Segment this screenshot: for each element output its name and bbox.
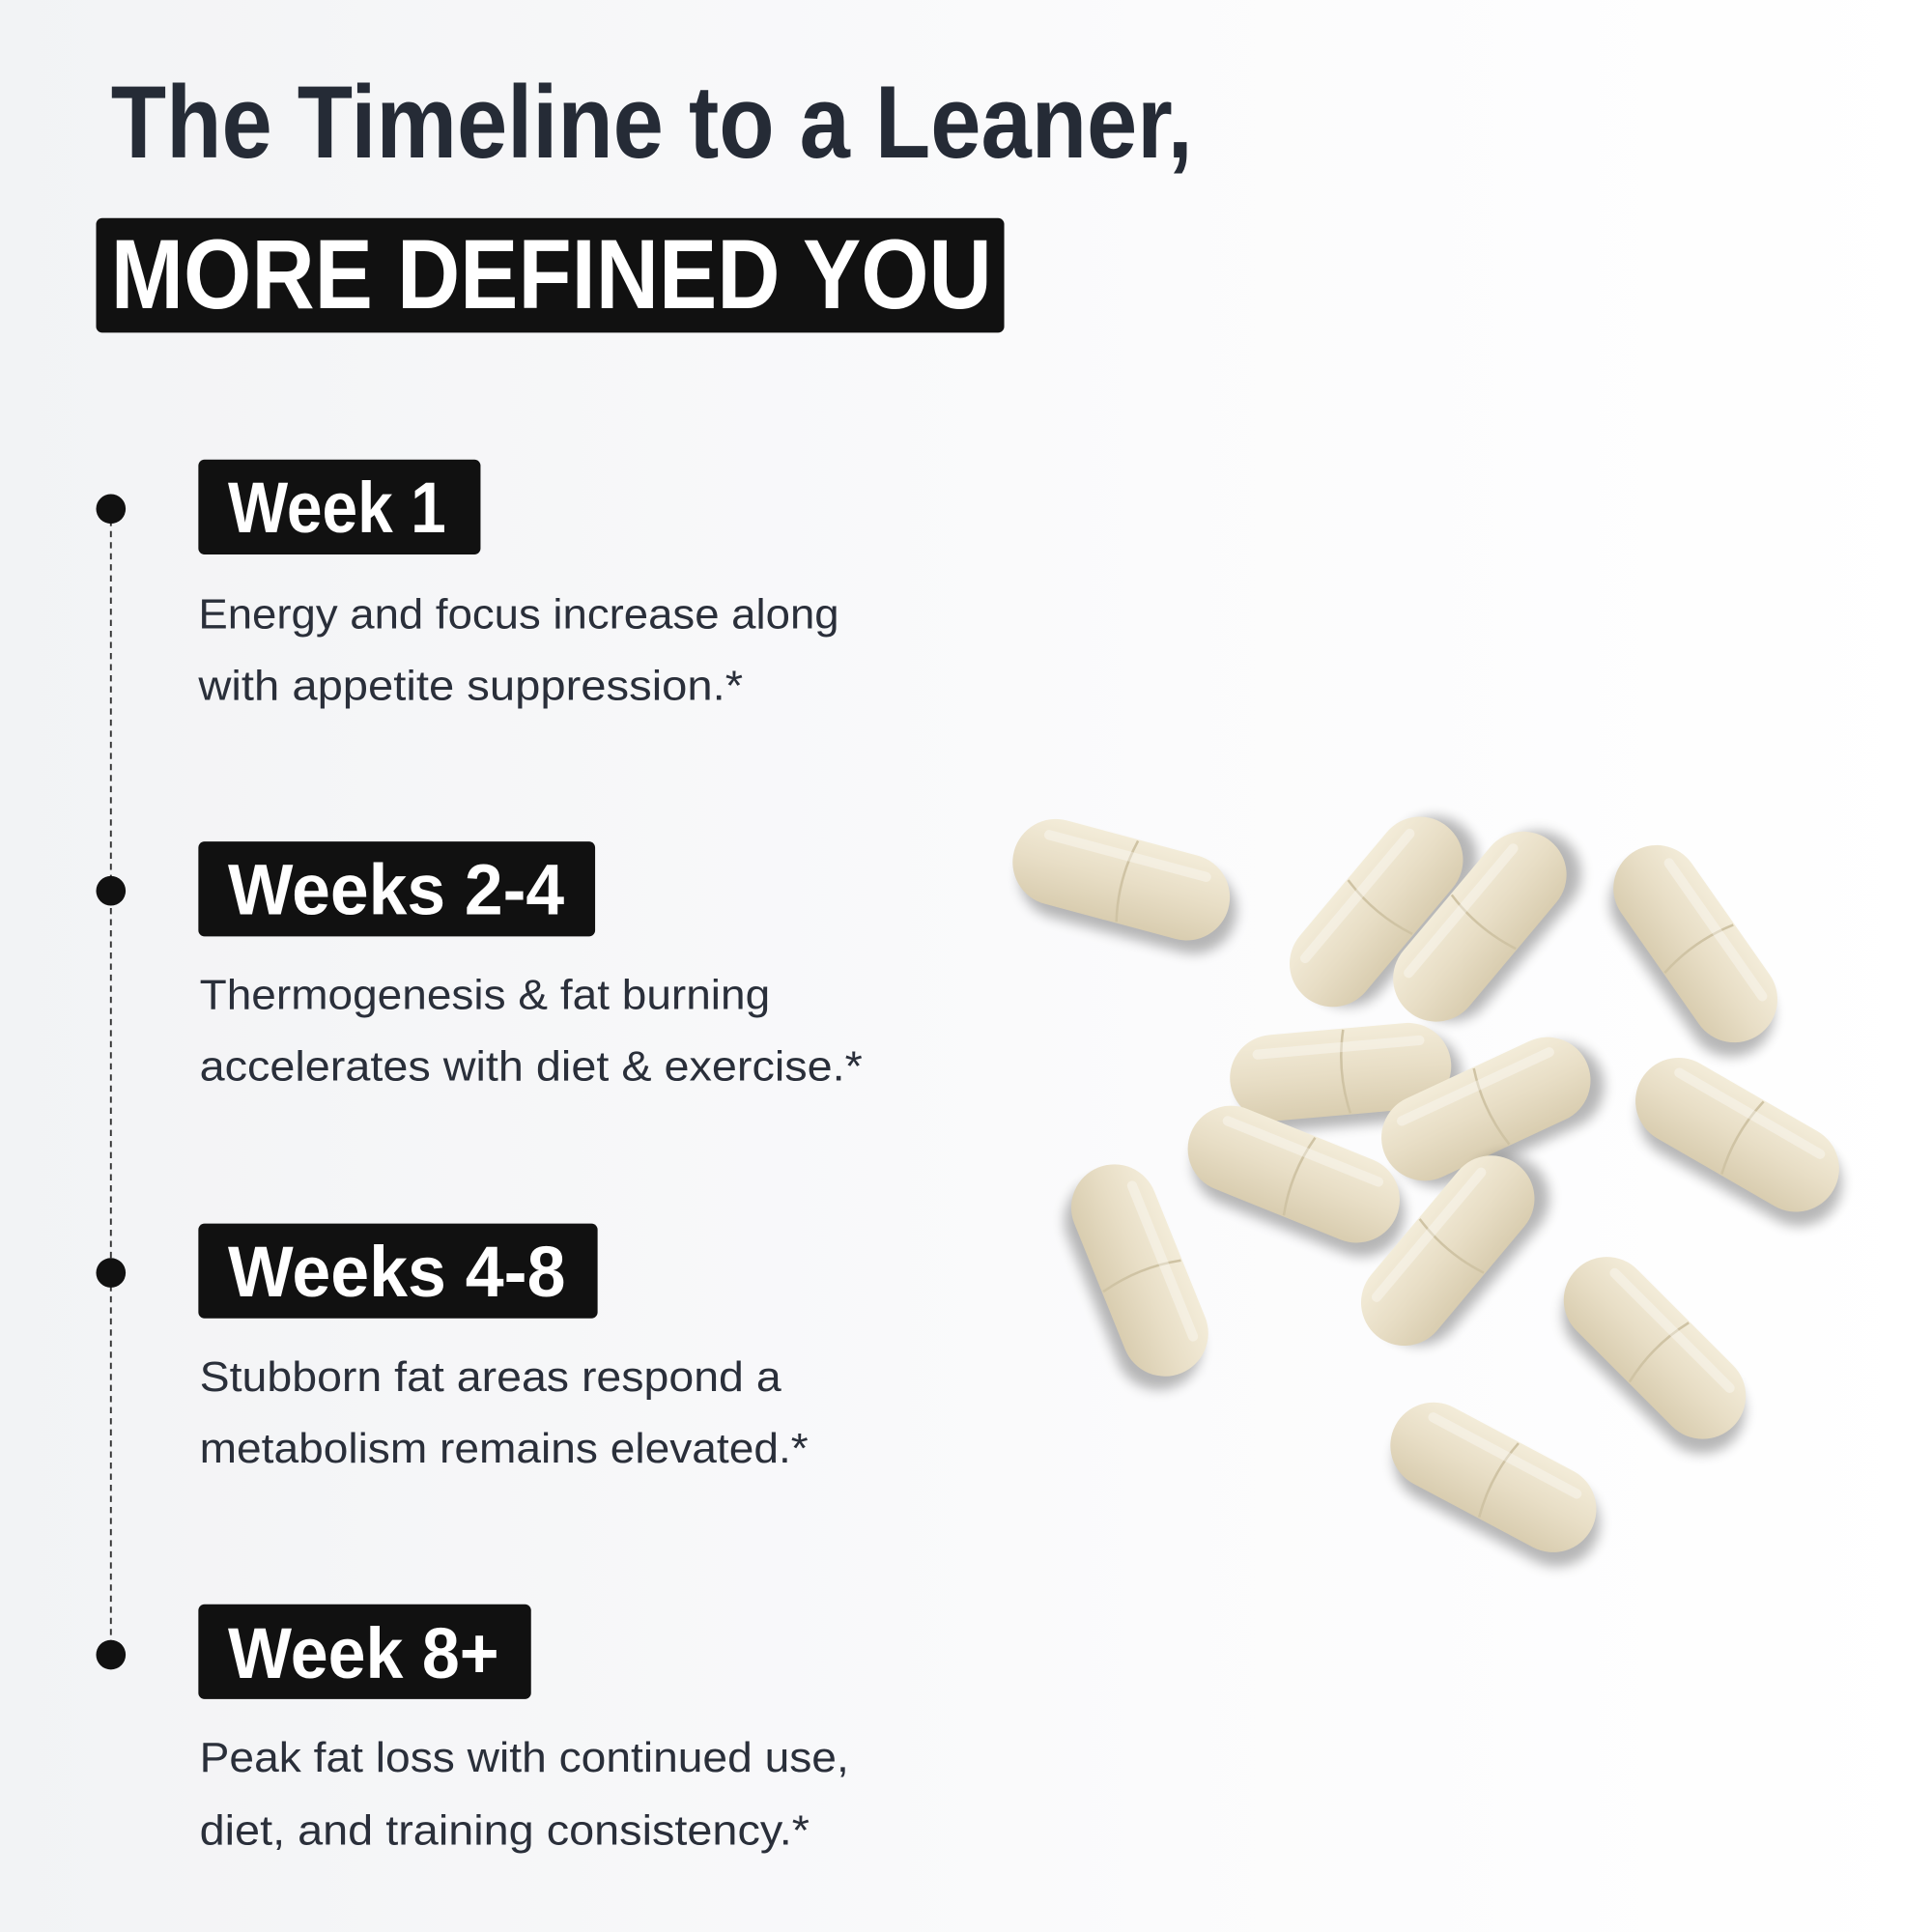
timeline: weeks 4-8: metabolism remains elevated.* [200, 1426, 809, 1472]
timeline: weeks 2-4: Weeks 2-4 [228, 849, 564, 929]
timeline: week 8+: diet, and training consistency.* [200, 1807, 810, 1854]
subtitle banner: MORE DEFINED YOU [111, 219, 992, 329]
timeline: week 8+: Peak fat loss with continued use, [200, 1735, 849, 1781]
timeline: week 1: with appetite suppression.* [197, 663, 743, 709]
timeline: week 8+: Week 8+ [228, 1613, 499, 1693]
timeline: weeks 2-4: Thermogenesis & fat burning [200, 973, 770, 1019]
timeline line [110, 509, 112, 1655]
capsules image [1000, 791, 1863, 1582]
timeline: week 1: Week 1 [228, 468, 446, 548]
timeline: weeks 4-8: Stubborn fat areas respond a [200, 1354, 782, 1401]
timeline: week 8+ [96, 1605, 849, 1854]
timeline: week 1 [96, 460, 839, 709]
title: The Timeline to a Leaner, [111, 64, 1193, 180]
timeline: week 1: Energy and focus increase along [198, 592, 839, 639]
timeline: weeks 2-4 [96, 841, 863, 1091]
timeline: weeks 2-4: accelerates with diet & exercise.* [200, 1044, 863, 1091]
timeline: weeks 4-8: Weeks 4-8 [228, 1232, 565, 1312]
timeline: weeks 4-8 [96, 1224, 809, 1472]
